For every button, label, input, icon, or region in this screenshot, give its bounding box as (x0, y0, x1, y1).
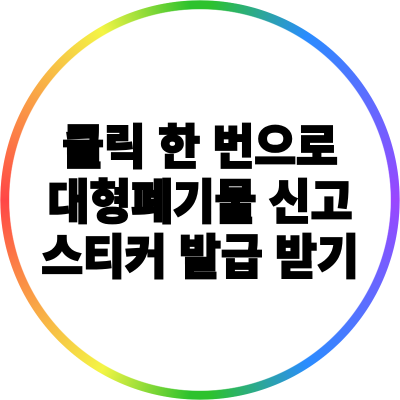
title line 1: 클릭 한 번으로 (62, 121, 338, 174)
title line 3: 스티커 발급 받기 (41, 231, 359, 284)
title line 2: 대형폐기물 신고 (48, 176, 352, 229)
